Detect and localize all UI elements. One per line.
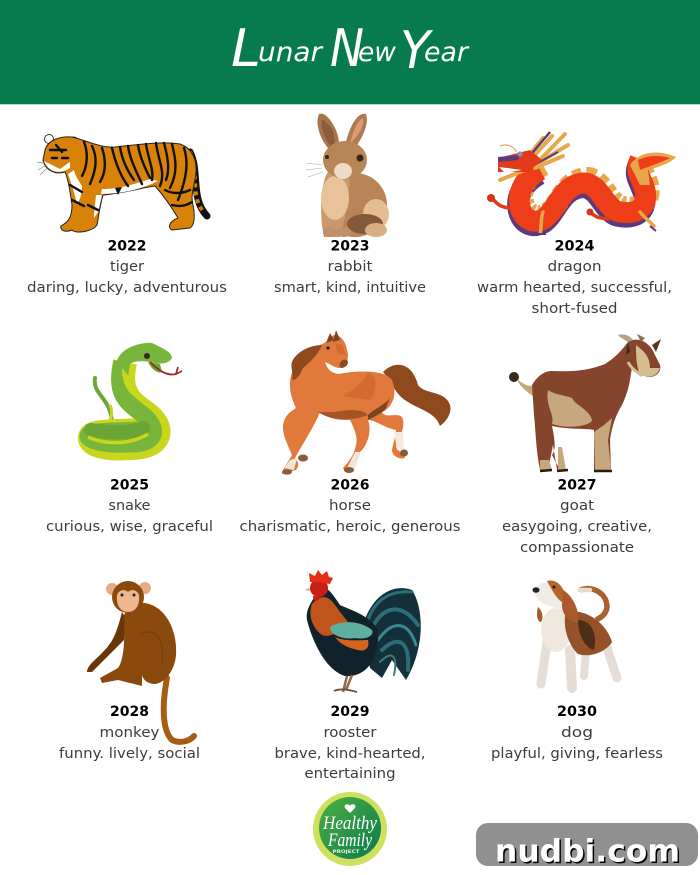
- animal name: goat: [560, 498, 594, 514]
- animal name: tiger: [110, 259, 144, 275]
- title: ear: [424, 37, 470, 68]
- panel: horse 2026: [240, 330, 460, 535]
- year: 2029: [330, 704, 370, 720]
- title: Y: [400, 21, 434, 81]
- watermark: nudbi.com: [495, 834, 680, 870]
- panel: goat 2027: [502, 334, 661, 556]
- header banner: [0, 0, 700, 105]
- traits: charismatic, heroic, generous: [240, 519, 460, 535]
- icon: tiger: [37, 134, 207, 232]
- panel: rooster 2029: [274, 570, 426, 782]
- traits: smart, kind, intuitive: [274, 280, 426, 296]
- panel: dragon 2024: short-fused: [532, 301, 618, 317]
- icon: rabbit: [306, 114, 389, 237]
- year: 2024: [554, 238, 594, 254]
- panel: rabbit 2023: [274, 114, 426, 296]
- watermark: nudbi.com: [496, 835, 682, 871]
- logo: Healthy Family Project: PROJECT: [332, 849, 361, 855]
- animal name: snake: [108, 498, 151, 514]
- animal name: monkey: [100, 725, 160, 741]
- animal name: dragon: [548, 259, 602, 275]
- year: 2023: [330, 238, 370, 254]
- panel: dragon 2024: [477, 132, 676, 317]
- icon: goat: [509, 334, 661, 472]
- title: N: [330, 19, 364, 79]
- year: 2030: [557, 704, 597, 720]
- logo: Healthy Family Project: Healthy: [322, 813, 377, 834]
- traits: playful, giving, fearless: [491, 746, 663, 762]
- icon: rooster: [305, 570, 421, 692]
- animal name: rabbit: [328, 259, 373, 275]
- year: 2027: [558, 478, 596, 494]
- traits: curious, wise, graceful: [46, 519, 213, 535]
- panel: snake 2025: [46, 343, 213, 535]
- panel: tiger 2022: [27, 134, 227, 296]
- watermark: [476, 823, 698, 871]
- title: L: [231, 19, 261, 79]
- year: 2025: [110, 478, 149, 494]
- animal name: dog: [561, 725, 593, 741]
- traits: funny. lively, social: [59, 746, 200, 762]
- traits: warm hearted, successful,: [477, 280, 672, 296]
- animal name: horse: [329, 498, 371, 514]
- panel: dog 2030: [491, 581, 663, 762]
- icon: dog: [532, 581, 617, 688]
- traits: easygoing, creative,: [502, 519, 652, 535]
- icon: horse: [282, 330, 451, 475]
- year: 2022: [108, 238, 146, 254]
- traits: daring, lucky, adventurous: [27, 280, 227, 296]
- title: unar: [258, 37, 324, 68]
- icon: dragon: [487, 132, 676, 234]
- title: ew: [358, 37, 397, 68]
- logo: Healthy Family Project: [313, 792, 387, 866]
- panel: monkey 2028: [59, 581, 200, 762]
- year: 2026: [330, 478, 370, 494]
- icon: snake: [88, 343, 182, 448]
- traits: brave, kind-hearted,: [274, 746, 426, 762]
- year: 2028: [110, 704, 149, 720]
- animal name: rooster: [324, 725, 377, 741]
- icon: monkey: [87, 581, 194, 742]
- title: [231, 19, 470, 81]
- panel: goat 2027: compassionate: [520, 540, 634, 556]
- panel: rooster 2029: entertaining: [304, 766, 396, 782]
- logo: Healthy Family Project: Family: [327, 830, 372, 851]
